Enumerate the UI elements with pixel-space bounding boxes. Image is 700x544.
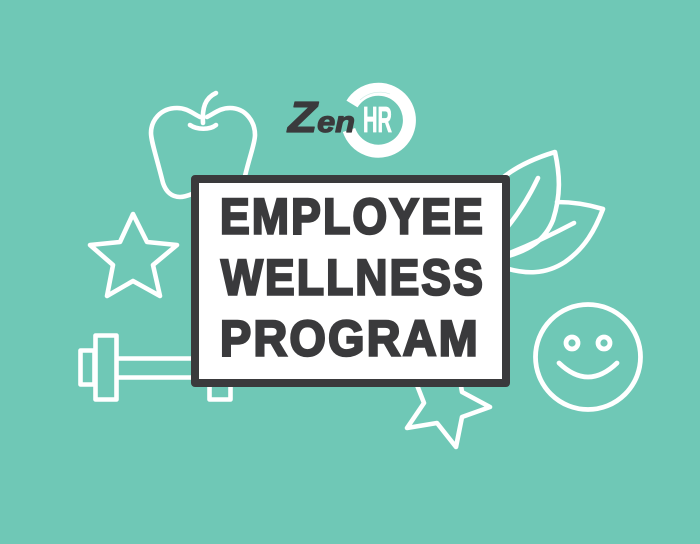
icon: leaves: [500, 152, 603, 272]
icon: apple: [151, 93, 255, 197]
title panel: [195, 179, 506, 383]
panel frame: [195, 179, 506, 383]
title text: WELLNESS: [221, 250, 485, 306]
title text: EMPLOYEE: [220, 188, 485, 244]
title text: PROGRAM: [220, 310, 480, 366]
icon: dumbbell: [80, 336, 230, 400]
icon: smiley face: [536, 304, 640, 410]
logo: ZenHR: [286, 89, 409, 151]
logo ring: [349, 89, 409, 151]
logo word: HR: HR: [363, 99, 392, 140]
title text: [220, 188, 485, 366]
icon: star bottom: [407, 380, 490, 447]
logo word: Zen: Zen: [286, 93, 355, 142]
icon: star left: [90, 214, 177, 296]
